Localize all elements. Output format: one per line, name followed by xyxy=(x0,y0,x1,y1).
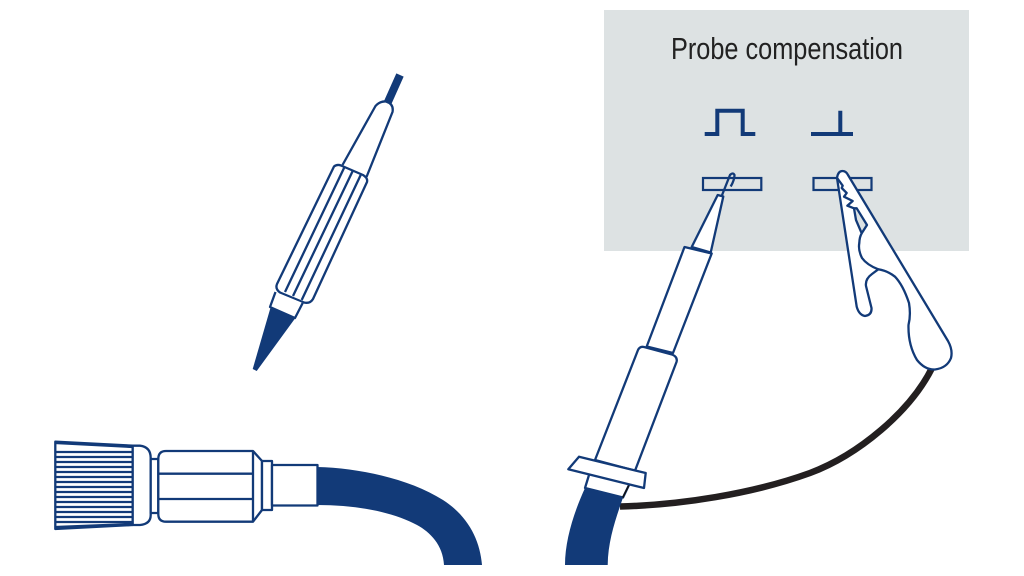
blue pointed tip xyxy=(253,307,295,371)
black edge of strain relief xyxy=(622,485,629,498)
knurled ring xyxy=(55,442,133,529)
standalone probe: spring tip and grip xyxy=(253,75,400,371)
alligator clip xyxy=(837,171,952,370)
neck xyxy=(151,459,158,513)
probe shaft xyxy=(647,247,712,353)
needle hook xyxy=(722,174,734,196)
clip outline xyxy=(837,171,952,370)
blue cable xyxy=(317,467,482,565)
probe cable xyxy=(565,488,623,565)
flange xyxy=(568,457,646,488)
probe nose xyxy=(342,101,393,177)
rounded nut xyxy=(133,446,151,525)
probe on calibration terminal xyxy=(565,174,734,565)
ground wire xyxy=(620,368,932,506)
ribbed grip xyxy=(276,165,367,303)
lower jaw curve xyxy=(859,233,878,269)
jaw opening xyxy=(854,208,867,233)
clip teeth xyxy=(837,178,854,208)
BNC connector with cable xyxy=(55,442,482,565)
icon: ground symbol xyxy=(811,111,853,134)
panel: probe compensation xyxy=(604,10,969,251)
heading: probe compensation: Probe compensation xyxy=(671,31,903,66)
signal terminal xyxy=(703,178,761,190)
icon: square wave signal xyxy=(705,111,755,134)
strain relief tube xyxy=(272,465,318,506)
probe end wire xyxy=(388,75,400,103)
connector body xyxy=(158,451,262,522)
probe cone tip xyxy=(692,195,723,252)
collar xyxy=(270,292,303,318)
strain relief xyxy=(585,475,629,498)
ground terminal xyxy=(814,178,872,190)
probe handle xyxy=(595,347,677,471)
ring xyxy=(262,461,272,510)
